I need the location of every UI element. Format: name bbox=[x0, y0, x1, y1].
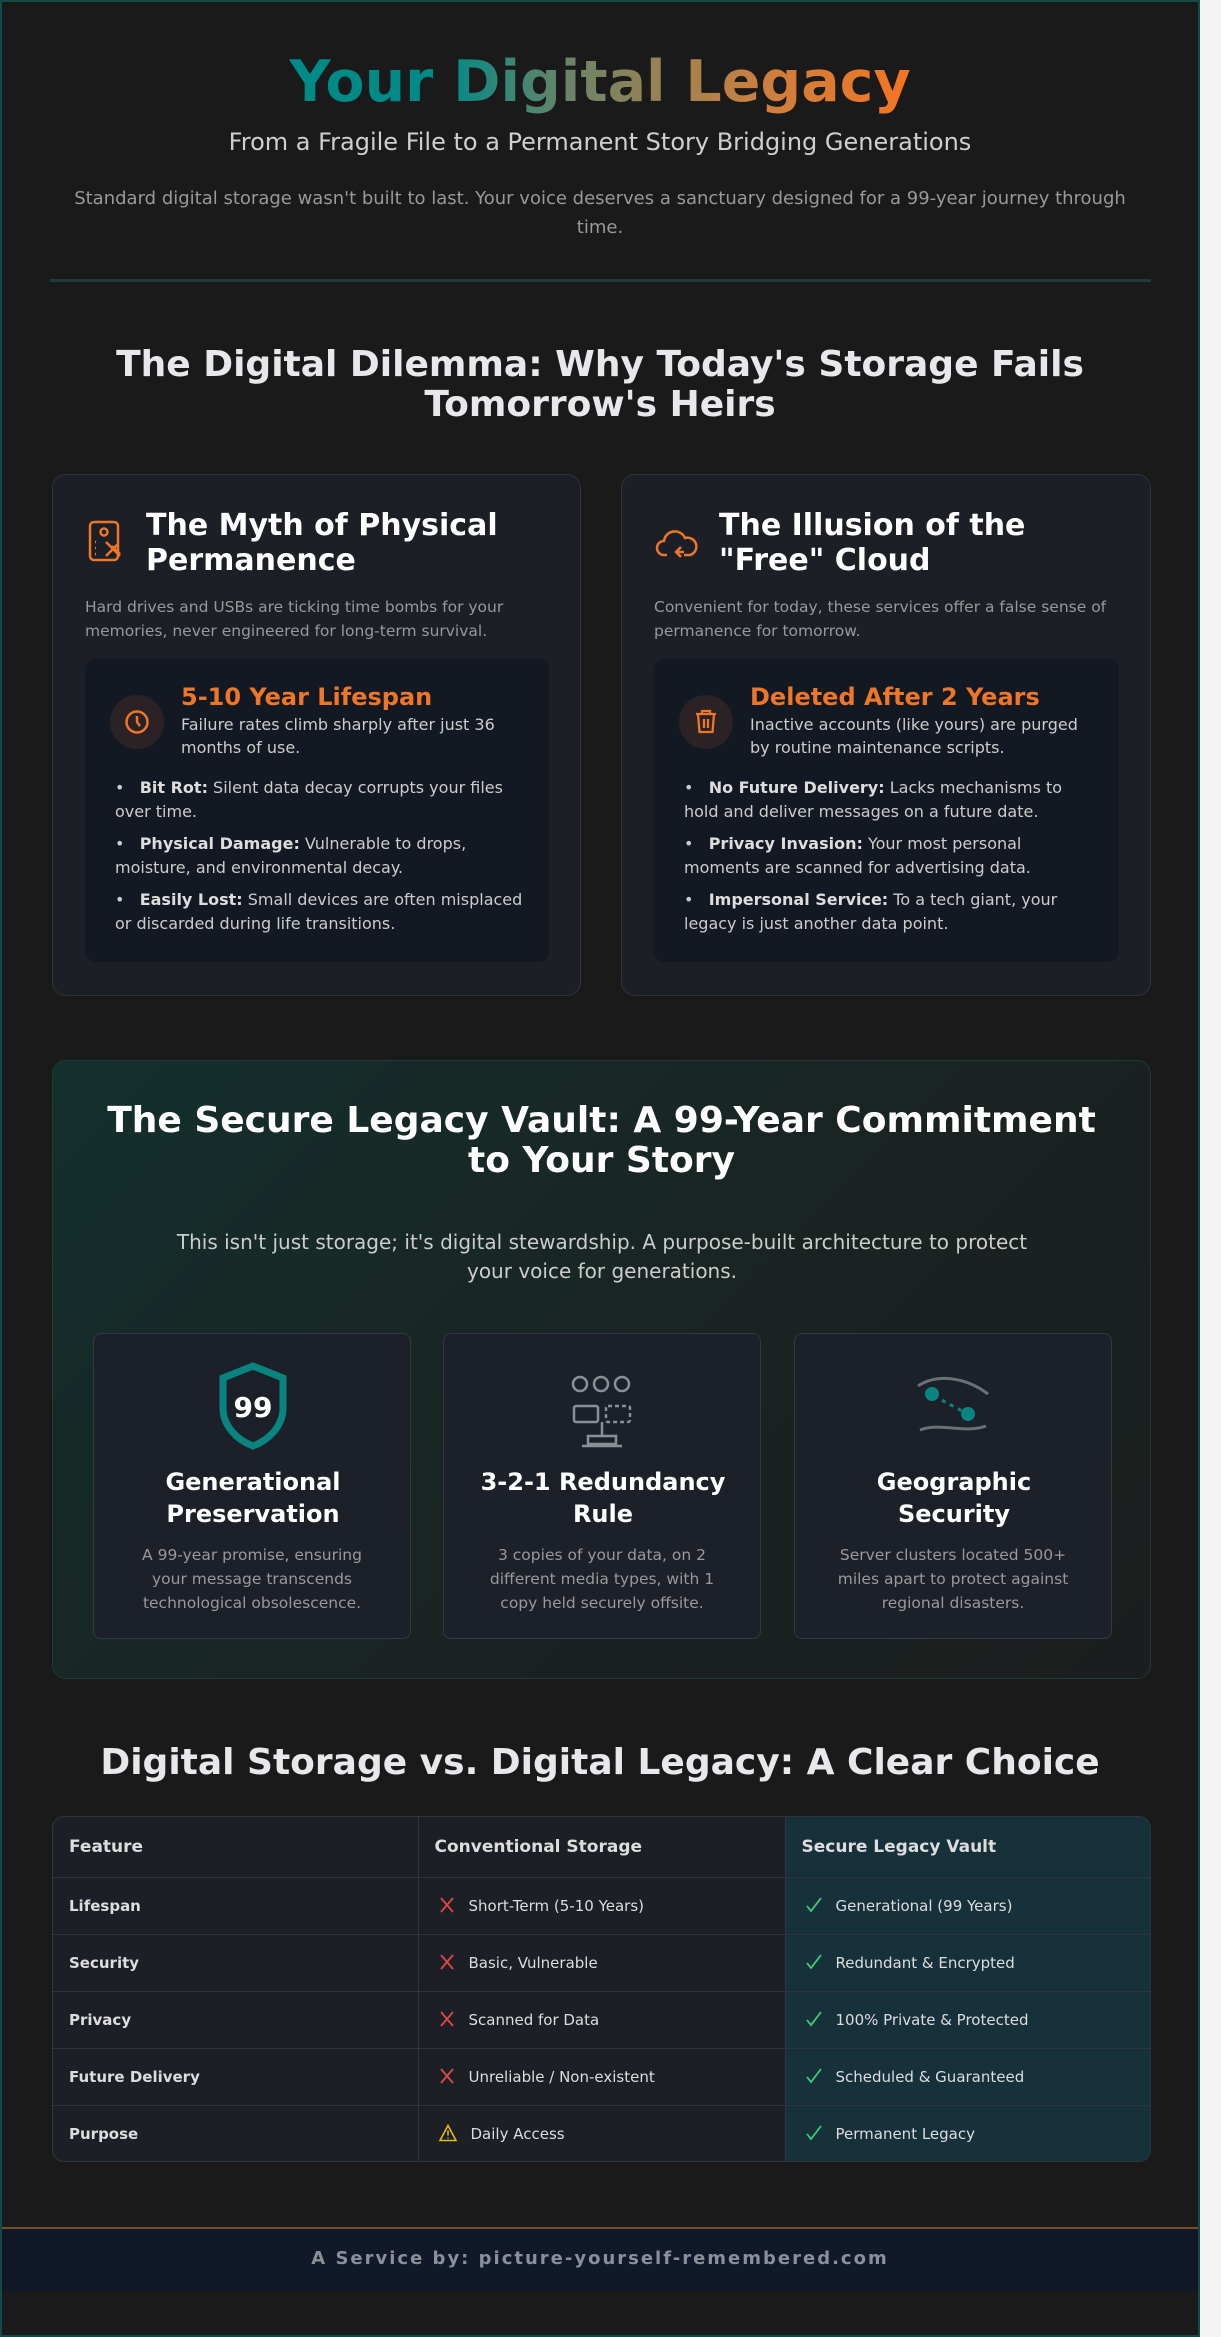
comparison table: Scanned for Data bbox=[468, 2011, 599, 2029]
subtitle: From a Fragile File to a Permanent Story Bridging Generations bbox=[229, 128, 971, 156]
stat title: Deleted After 2 Years bbox=[750, 683, 1040, 711]
panel: physical permanence bbox=[52, 474, 581, 996]
comparison table: Redundant & Encrypted bbox=[836, 1954, 1015, 1972]
icon: trash bbox=[679, 695, 733, 749]
comparison table: Privacy bbox=[69, 2010, 131, 2028]
intro text: Standard digital storage wasn't built to last. Your voice deserves a sanctuary designed for a 99-year journey through time. bbox=[74, 188, 1126, 238]
bullet list bbox=[115, 778, 522, 932]
comparison table: Conventional Storage bbox=[434, 1837, 642, 1857]
icon: shield 99: 99 bbox=[234, 1391, 272, 1424]
comparison table: Permanent Legacy bbox=[836, 2125, 975, 2143]
feature title: Geographic Security bbox=[877, 1468, 1031, 1528]
vault description: This isn't just storage; it's digital stewardship. A purpose-built architecture to protect your voice for generations. bbox=[177, 1230, 1027, 1283]
footer: A Service by: picture-yourself-remembered.com bbox=[311, 2248, 889, 2269]
stat title: 5-10 Year Lifespan bbox=[181, 683, 432, 711]
feature desc: 3 copies of your data, on 2 different media types, with 1 copy held securely offsite. bbox=[490, 1546, 714, 1612]
feature: 3-2-1 redundancy bbox=[443, 1333, 761, 1639]
comparison table bbox=[52, 1816, 1151, 2162]
stat box bbox=[85, 659, 549, 962]
comparison table: Unreliable / Non-existent bbox=[468, 2068, 655, 2086]
comparison table: 100% Private & Protected bbox=[836, 2011, 1028, 2029]
card desc: Convenient for today, these services offer a false sense of permanence for tomorrow. bbox=[654, 598, 1106, 640]
bullet list: • Impersonal Service: To a tech giant, your legacy is just another data point. bbox=[684, 890, 1057, 932]
icon: servers bbox=[572, 1376, 632, 1448]
card title: The Illusion of the "Free" Cloud bbox=[719, 508, 1025, 578]
card desc: Hard drives and USBs are ticking time bombs for your memories, never engineered for long-term survival. bbox=[85, 598, 503, 640]
comparison table: Basic, Vulnerable bbox=[468, 1954, 598, 1972]
icon: shield 99 bbox=[220, 1362, 286, 1450]
bullet list: • Physical Damage: Vulnerable to drops, moisture, and environmental decay. bbox=[115, 834, 466, 876]
feature desc: Server clusters located 500+ miles apart to protect against regional disasters. bbox=[838, 1546, 1068, 1612]
heading: comparison: Digital Storage vs. Digital Legacy: A Clear Choice bbox=[100, 1742, 1100, 1783]
comparison table: Generational (99 Years) bbox=[836, 1897, 1012, 1915]
comparison table: Short-Term (5-10 Years) bbox=[468, 1897, 644, 1915]
comparison table: Secure Legacy Vault bbox=[802, 1837, 996, 1857]
feature desc: A 99-year promise, ensuring your message transcends technological obsolescence. bbox=[142, 1546, 362, 1612]
panel: free cloud bbox=[621, 474, 1151, 996]
stat desc: Failure rates climb sharply after just 36 months of use. bbox=[181, 715, 495, 757]
bullet list: • Easily Lost: Small devices are often misplaced or discarded during life transitions. bbox=[115, 890, 522, 932]
feature title: 3-2-1 Redundancy Rule bbox=[481, 1468, 725, 1528]
card title: The Myth of Physical Permanence bbox=[146, 508, 498, 578]
vault heading: The Secure Legacy Vault: A 99-Year Commitment to Your Story bbox=[107, 1100, 1096, 1181]
comparison table: Purpose bbox=[69, 2125, 138, 2143]
bullet list: • No Future Delivery: Lacks mechanisms to hold and deliver messages on a future date. bbox=[684, 778, 1062, 820]
feature title: Generational Preservation bbox=[165, 1468, 341, 1528]
feature: generational preservation bbox=[93, 1333, 411, 1639]
comparison table: Scheduled & Guaranteed bbox=[836, 2068, 1024, 2086]
comparison table: Feature bbox=[69, 1837, 143, 1857]
icon: clock bbox=[110, 695, 164, 749]
comparison table: Daily Access bbox=[470, 2125, 565, 2143]
comparison table: Lifespan bbox=[69, 1896, 141, 1914]
icon: drive bbox=[88, 520, 121, 562]
footer bbox=[2, 2227, 1198, 2291]
icon: cloud bbox=[656, 530, 698, 558]
stat desc: Inactive accounts (like yours) are purged by routine maintenance scripts. bbox=[750, 715, 1078, 757]
panel: secure legacy vault bbox=[52, 1060, 1151, 1679]
icon: map bbox=[917, 1376, 989, 1432]
bullet list bbox=[684, 778, 1062, 932]
bullet list: • Bit Rot: Silent data decay corrupts your files over time. bbox=[115, 778, 503, 820]
stat box bbox=[654, 659, 1119, 962]
comparison table: Future Delivery bbox=[69, 2068, 200, 2086]
comparison table: Security bbox=[69, 1954, 139, 1972]
feature: geographic security bbox=[794, 1333, 1112, 1639]
title: Your Digital Legacy bbox=[289, 49, 911, 115]
heading: digital dilemma: The Digital Dilemma: Why Today's Storage Fails Tomorrow's Heirs bbox=[116, 344, 1084, 425]
bullet list: • Privacy Invasion: Your most personal moments are scanned for advertising data. bbox=[684, 834, 1031, 876]
